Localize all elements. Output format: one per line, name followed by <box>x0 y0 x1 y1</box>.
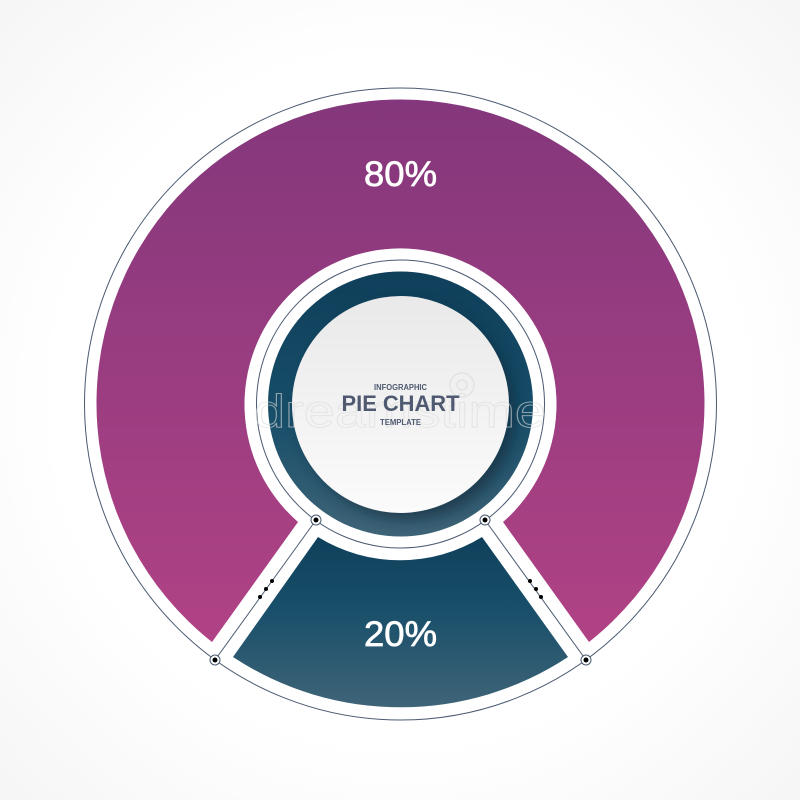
center title: INFOGRAPHIC <box>374 383 427 392</box>
slice: 20% <box>233 537 568 707</box>
center disc <box>292 296 509 513</box>
label: 20%: 20% <box>364 615 437 654</box>
right connector <box>480 515 591 665</box>
watermark: dreamstime <box>254 385 546 437</box>
slice: 80% <box>96 99 704 642</box>
watermark <box>254 373 546 437</box>
label: 80%: 80% <box>364 155 437 194</box>
center title: TEMPLATE <box>380 418 422 427</box>
disc shadow <box>300 304 516 520</box>
inner guide circle <box>256 260 544 548</box>
center title: PIE CHART <box>342 391 460 416</box>
inner teal ring <box>268 272 533 536</box>
left connector <box>210 515 321 665</box>
outer guide circle <box>84 88 716 720</box>
center title <box>342 383 460 427</box>
